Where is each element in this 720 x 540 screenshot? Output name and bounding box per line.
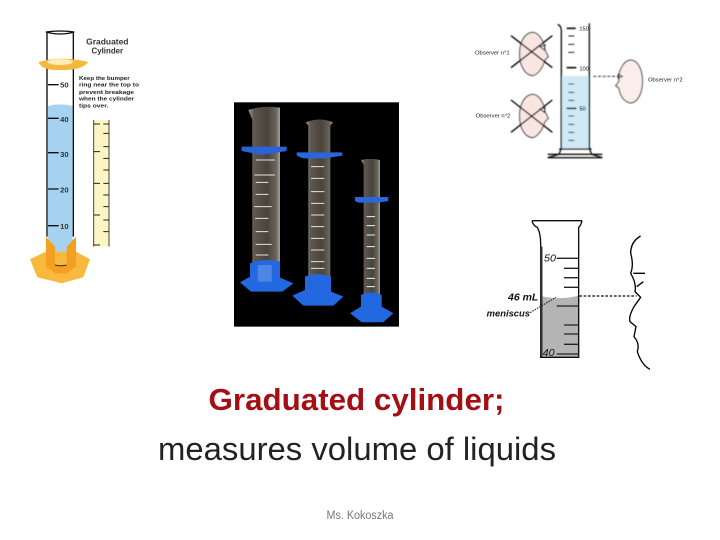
title: Graduated cylinder: Graduated cylinder; (208, 382, 504, 417)
bumper ring note: prevent breakage (79, 90, 134, 96)
reading labels: 40 (543, 348, 555, 359)
scale labels: 10 (60, 222, 69, 231)
scale ticks (48, 85, 59, 226)
reading labels: 50 (544, 253, 556, 264)
subtitle: measures volume of liquids: measures volume of liquids (158, 431, 556, 467)
reading labels: 46 mL (507, 292, 538, 303)
illustration: labelled graduated cylinder (30, 31, 140, 283)
cylinder liquid (561, 76, 589, 148)
middle cylinder (292, 119, 343, 306)
scale labels: 50 (60, 81, 69, 90)
heading: Graduated Cylinder: Cylinder (91, 45, 124, 55)
observer 3 head with sight line (593, 60, 642, 103)
scale labels: 40 (60, 115, 69, 124)
ruler detail (93, 120, 109, 247)
liquid (48, 104, 73, 265)
photo: three glass cylinders with blue bases (234, 102, 399, 327)
bumper ring note: ring near the top to (79, 83, 140, 89)
bumper ring note: Keep the bumper (79, 76, 131, 82)
cylinder ticks (567, 28, 576, 108)
cylinder scale labels: 50 (579, 106, 586, 112)
bumper ring note (78, 76, 140, 109)
hexagon base (30, 252, 90, 283)
footer: author: Ms. Kokoszka (326, 510, 394, 522)
face profile (630, 236, 650, 369)
graduation ticks (557, 258, 579, 354)
scale labels: 30 (60, 150, 69, 159)
observer labels (475, 51, 683, 120)
black background (234, 102, 399, 327)
observer labels: Observer n°2 (648, 77, 683, 83)
cylinder scale labels (579, 27, 589, 112)
heading: Graduated Cylinder: Graduated (86, 37, 128, 47)
tall cylinder (240, 107, 293, 292)
scale labels (60, 81, 69, 231)
observer labels: Observer n°1 (475, 51, 510, 57)
reading labels (487, 253, 556, 359)
diagram: reading the meniscus from three observer positions (475, 23, 683, 158)
bumper ring note: when the cylinder (78, 97, 135, 103)
bumper ring (39, 59, 88, 70)
bumper ring note: tips over. (79, 103, 109, 109)
sight line (579, 294, 637, 298)
diagram: 46 mL meniscus reading (487, 221, 650, 369)
short cylinder (350, 159, 393, 322)
cylinder scale labels: 100 (579, 66, 589, 72)
cylinder walls (46, 31, 74, 237)
cylinder scale labels: 150 (579, 27, 589, 33)
reading labels: meniscus (487, 308, 530, 318)
glass outline (532, 221, 582, 357)
meniscus pointer (530, 297, 556, 313)
observer 1 head, crossed out (511, 32, 552, 76)
observer labels: Observer n°2 (476, 114, 510, 120)
liquid (541, 295, 579, 357)
scale labels: 20 (60, 186, 69, 195)
heading: Graduated Cylinder (86, 37, 128, 55)
cylinder outline and foot (548, 23, 602, 158)
observer 2 head, crossed out (511, 94, 552, 138)
